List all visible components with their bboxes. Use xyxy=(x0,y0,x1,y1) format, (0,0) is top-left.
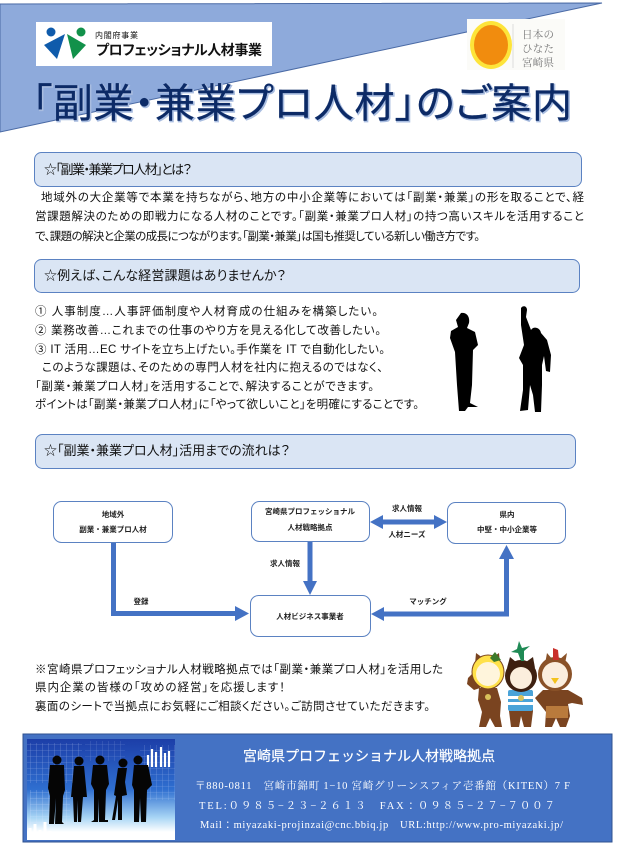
icon: businessman raising fist xyxy=(519,306,551,412)
heading: examples: ☆例えば、こんな経営課題はありませんか？ xyxy=(44,268,286,283)
arrow: job information down: 求人情報 xyxy=(270,558,300,568)
arrow: matching: マッチング xyxy=(409,596,447,606)
mascots xyxy=(467,641,583,727)
box: talent business operator: 人材ビジネス事業者 xyxy=(276,611,344,621)
closing note: 裏面のシートで当拠点にお気軽にご相談ください。ご訪問させていただきます。 xyxy=(35,699,430,713)
list: management issues: ② 業務改善…これまでの仕事のやり方を見える化して改善したい。 xyxy=(35,323,381,337)
title: 「副業・兼業プロ人材」のご案内 xyxy=(33,83,573,127)
logo: professional talent project: 内閣府事業 xyxy=(95,30,138,40)
closing note: 県内企業の皆様の「攻めの経営」を応援します！ xyxy=(35,680,285,694)
box: Miyazaki base: 人材戦略拠点 xyxy=(288,522,333,532)
list: management issues: ① 人事制度…人事評価制度や人材育成の仕組みを構築したい。 xyxy=(35,304,378,318)
logo: Hinata Miyazaki: ひなた xyxy=(522,43,554,55)
box: local companies: 中堅・中小企業等 xyxy=(477,524,537,534)
list: management issues: ポイントは「副業・兼業プロ人材」に「やって欲しいこと」を明確にすることです。 xyxy=(35,397,419,411)
arrow: registration xyxy=(111,543,249,621)
arrow: two-way exchange xyxy=(370,503,447,539)
arrow: job information down xyxy=(270,542,317,595)
flow chart xyxy=(54,502,566,636)
logo: professional talent project xyxy=(36,22,272,66)
list: management issues: このような課題は、そのための専門人材を社内に抱えるのではなく、 xyxy=(42,360,383,374)
box: outside talent xyxy=(54,502,172,542)
paragraph: definition: 営課題解決のための即戦力になる人材のことです。「副業・兼業プロ人材」の持つ高いスキルを活用すること xyxy=(35,209,584,223)
logo: Hinata Miyazaki: 日本の xyxy=(522,28,554,41)
box: Miyazaki base: 宮崎県プロフェッショナル xyxy=(265,506,355,516)
box: Miyazaki base xyxy=(252,502,370,542)
mascot: rooster xyxy=(535,648,583,727)
box: talent business operator xyxy=(250,596,370,636)
logo: Hinata Miyazaki xyxy=(467,19,565,70)
arrow: matching xyxy=(371,545,514,621)
heading: examples xyxy=(34,260,580,292)
footer heading: 宮崎県プロフェッショナル人材戦略拠点 xyxy=(243,748,495,764)
closing note xyxy=(35,662,443,713)
box: local companies xyxy=(448,502,566,544)
footer address: 〒880-0811 宮崎市錦町 1−10 宮崎グリーンスフィア壱番館（KITEN）7 F xyxy=(195,779,570,792)
footer panel xyxy=(23,734,612,842)
paragraph: definition xyxy=(35,190,584,243)
heading: what is: ☆「副業・兼業プロ人材」とは？ xyxy=(44,162,192,177)
list: management issues: ③ IT 活用…EC サイトを立ち上げたい。手作業を IT で自動化したい。 xyxy=(35,342,385,356)
heading: flow xyxy=(36,434,576,468)
logo: professional talent project: プロフェッショナル人材事業 xyxy=(96,42,262,58)
photo: business silhouettes xyxy=(27,739,175,840)
arrow: registration: 登録 xyxy=(134,596,149,606)
closing note: ※宮崎県プロフェッショナル人材戦略拠点では「副業・兼業プロ人材」を活用した xyxy=(35,662,443,676)
list: management issues: 「副業・兼業プロ人材」を活用することで、解決することができます。 xyxy=(35,379,374,393)
header triangle banner xyxy=(0,3,602,132)
mascot: palm xyxy=(505,641,537,727)
box: outside talent: 地域外 xyxy=(102,509,125,519)
arrow: two-way exchange: 求人情報 xyxy=(392,503,422,513)
heading: what is xyxy=(34,152,582,186)
logo: Hinata Miyazaki: 宮崎県 xyxy=(522,56,554,69)
list: management issues xyxy=(35,304,419,411)
footer mail and url: Mail：miyazaki-projinzai@cnc.bbiq.jp URL:http://www.pro-miyazaki.jp/ xyxy=(200,820,563,831)
heading: flow: ☆「副業・兼業プロ人材」活用までの流れは？ xyxy=(44,443,290,458)
footer phone and fax: TEL:０９８５−２３−２６１３ FAX：０９８５−２７−７００７ xyxy=(199,801,555,812)
paragraph: definition: で、課題の解決と企業の成長につながります。「副業・兼業」は国も推奨している新しい働き方です。 xyxy=(35,229,480,243)
box: outside talent: 副業・兼業プロ人材 xyxy=(79,524,147,534)
paragraph: definition: 地域外の大企業等で本業を持ちながら、地方の中小企業等においては「副業・兼業」の形を取ることで、経 xyxy=(41,190,584,204)
title: 「副業・兼業プロ人材」のご案内 xyxy=(32,82,572,126)
mascot: lemon xyxy=(467,652,504,727)
arrow: two-way exchange: 人材ニーズ xyxy=(388,529,426,539)
box: local companies: 県内 xyxy=(500,509,514,519)
icon: businessman arms crossed xyxy=(450,313,478,411)
